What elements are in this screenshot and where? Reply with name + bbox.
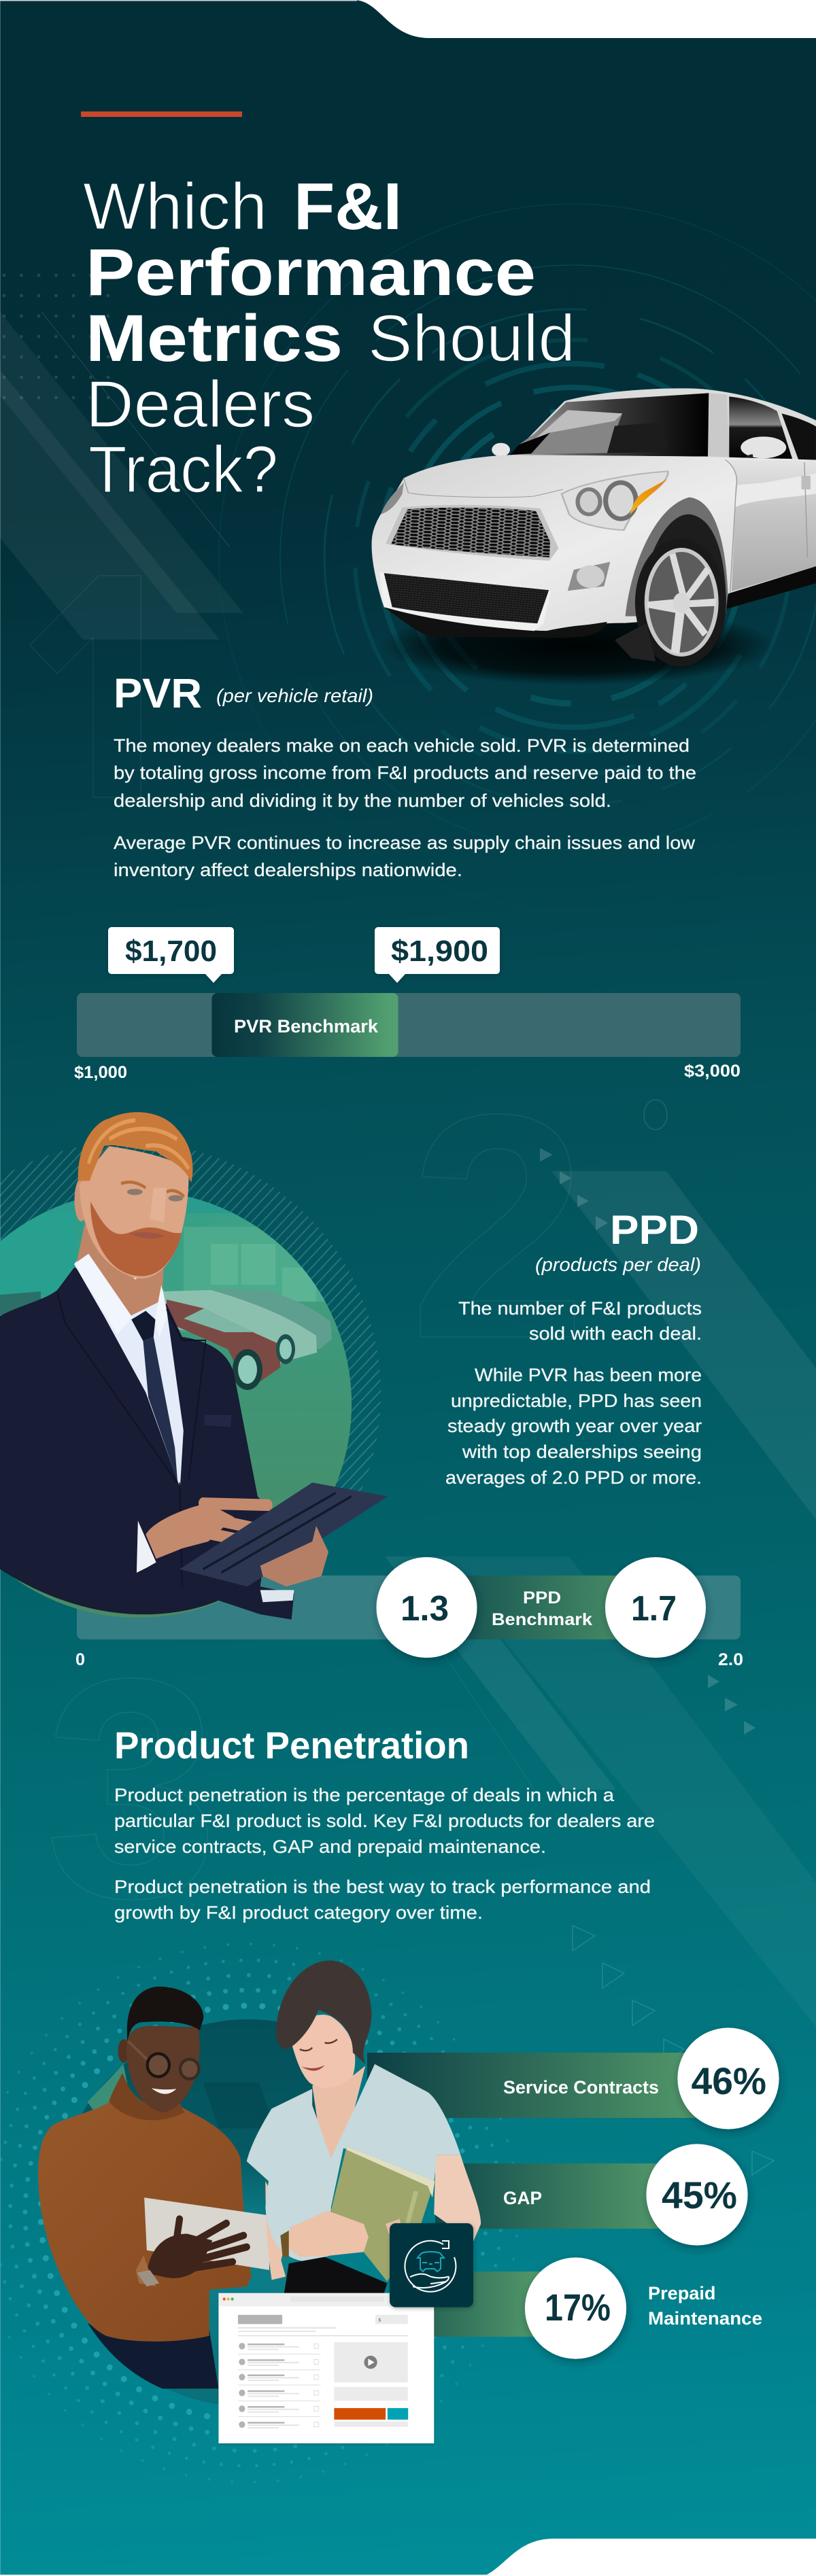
bar: Service Contracts: Service Contracts bbox=[503, 2077, 659, 2098]
PPD subtitle: (products per deal) bbox=[535, 1254, 701, 1275]
PVR description: inventory affect dealerships nationwide. bbox=[114, 860, 462, 880]
title: Dealers bbox=[86, 367, 315, 441]
photo: two colleagues with tablet bbox=[38, 1960, 481, 2407]
PPD description: While PVR has been more bbox=[475, 1365, 702, 1385]
icon: car in hand with renewal arrow bbox=[390, 2223, 473, 2307]
title: Metrics bbox=[86, 301, 343, 375]
PPD description: averages of 2.0 PPD or more. bbox=[445, 1467, 702, 1488]
PPD heading: PPD bbox=[610, 1207, 699, 1253]
background diagonal bands and outlines bbox=[0, 258, 816, 2175]
axis label: $3,000: $3,000 bbox=[684, 1062, 741, 1081]
value circle: 1.3 bbox=[377, 1557, 477, 1658]
photo: businessman with tablet in showroom bbox=[0, 1112, 388, 1620]
value circle: 17%: 17% bbox=[545, 2286, 611, 2329]
title: Track? bbox=[88, 432, 278, 506]
callout: $1,700 bbox=[108, 927, 234, 983]
label: Prepaid Maintenance: Prepaid bbox=[648, 2283, 715, 2303]
PPD benchmark range bbox=[435, 1576, 653, 1639]
value circle: 1.7 bbox=[605, 1557, 706, 1658]
PPD benchmark label: PPD bbox=[523, 1588, 561, 1607]
axis label: 0: 0 bbox=[75, 1650, 85, 1669]
PPD description: with top dealerships seeing bbox=[462, 1442, 702, 1462]
PVR description: The money dealers make on each vehicle sold. PVR is determined bbox=[114, 735, 690, 756]
product penetration description: growth by F&I product category over time. bbox=[114, 1902, 483, 1923]
accent line bbox=[81, 111, 242, 117]
mockup: browser window: $ bbox=[379, 2318, 381, 2323]
title: F&I bbox=[294, 169, 402, 243]
bar: Service Contracts bbox=[367, 2053, 728, 2118]
PVR benchmark range: PVR Benchmark bbox=[234, 1016, 379, 1037]
background diagonal bands and outlines: 2 bbox=[409, 1048, 587, 1405]
PVR heading: PVR bbox=[114, 670, 202, 716]
PPD description: unpredictable, PPD has seen bbox=[451, 1391, 702, 1411]
title: Performance bbox=[86, 235, 536, 309]
section: PPD bbox=[445, 1207, 702, 1488]
PPD benchmark label: Benchmark bbox=[492, 1610, 592, 1629]
chart: PPD benchmark bar bbox=[75, 1557, 743, 1669]
callout: $1,900 bbox=[375, 927, 500, 983]
dotted rings behind photo bbox=[0, 1944, 517, 2482]
value circle: 45% bbox=[646, 2144, 748, 2246]
value circle: 1.7: 1.7 bbox=[631, 1589, 677, 1629]
section: PVR bbox=[114, 670, 696, 880]
title: Which bbox=[83, 169, 267, 243]
value circle: 45%: 45% bbox=[662, 2174, 737, 2216]
mockup: browser window bbox=[218, 2293, 434, 2443]
value circle: 1.3: 1.3 bbox=[401, 1589, 449, 1629]
product penetration description: Product penetration is the best way to track performance and bbox=[114, 1877, 651, 1897]
PPD description bbox=[445, 1298, 702, 1488]
illustration: silver car bbox=[372, 388, 816, 685]
section: product penetration bbox=[114, 1724, 655, 1923]
value circle: 17% bbox=[525, 2257, 626, 2359]
bar: GAP bbox=[435, 2163, 697, 2229]
concentric arcs behind car bbox=[219, 204, 816, 911]
PPD benchmark label bbox=[492, 1588, 592, 1629]
callout: $1,900: $1,900 bbox=[391, 935, 488, 968]
PPD description: steady growth year over year bbox=[447, 1416, 702, 1436]
bar: Prepaid Maintenance bbox=[428, 2272, 575, 2337]
background diagonal bands and outlines: 3 bbox=[45, 1614, 219, 1963]
PVR description: dealership and dividing it by the number of vehicles sold. bbox=[114, 790, 611, 811]
label: Prepaid Maintenance: Maintenance bbox=[648, 2308, 762, 2329]
axis label: $1,000: $1,000 bbox=[74, 1063, 127, 1082]
title: Should bbox=[368, 301, 575, 375]
PVR description bbox=[114, 735, 696, 880]
callout: $1,700: $1,700 bbox=[125, 935, 217, 968]
label: Prepaid Maintenance bbox=[648, 2283, 762, 2329]
value circle: 46%: 46% bbox=[691, 2059, 766, 2102]
PVR description: by totaling gross income from F&I products and reserve paid to the bbox=[114, 763, 696, 783]
PVR benchmark range bbox=[212, 993, 398, 1057]
value circle: 46% bbox=[677, 2027, 779, 2129]
chart: PVR benchmark bar bbox=[74, 927, 741, 1082]
bar: GAP: GAP bbox=[503, 2188, 542, 2208]
product penetration description: service contracts, GAP and prepaid maintenance. bbox=[114, 1837, 546, 1857]
PVR subtitle: (per vehicle retail) bbox=[216, 685, 373, 706]
product penetration description bbox=[114, 1785, 655, 1923]
product penetration description: particular F&I product is sold. Key F&I products for dealers are bbox=[114, 1811, 655, 1831]
product penetration description: Product penetration is the percentage of deals in which a bbox=[114, 1785, 615, 1805]
product penetration heading: Product Penetration bbox=[114, 1724, 469, 1766]
PPD description: sold with each deal. bbox=[529, 1323, 702, 1344]
PPD description: The number of F&I products bbox=[458, 1298, 702, 1319]
title bbox=[83, 169, 575, 506]
axis label: 2.0: 2.0 bbox=[718, 1650, 743, 1669]
PVR description: Average PVR continues to increase as supply chain issues and low bbox=[114, 833, 696, 853]
